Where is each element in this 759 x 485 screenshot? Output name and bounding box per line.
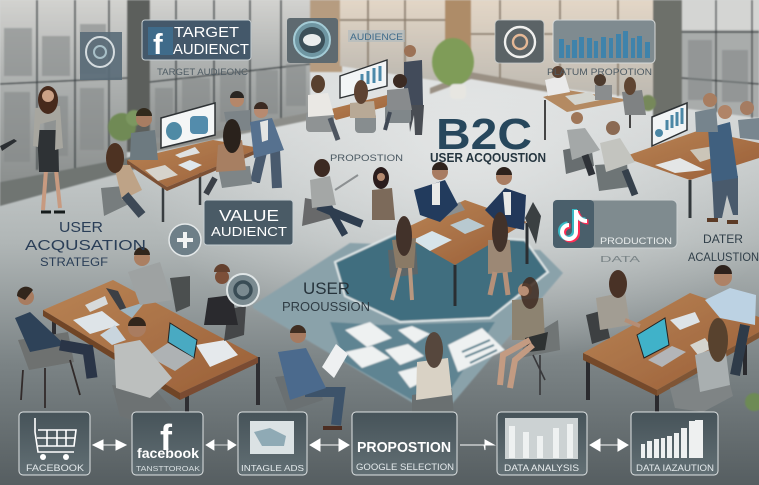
- user acquisition strategy label: USER: [59, 219, 103, 236]
- person: man left seated: [15, 287, 92, 408]
- person: man front seated: [112, 317, 172, 424]
- right warm window: [471, 0, 655, 100]
- person: woman dark top: [204, 264, 246, 341]
- skyline texture: [4, 24, 748, 162]
- heading: B2C: B2C: [436, 110, 532, 159]
- monitor upper middle: [340, 60, 387, 98]
- left window: [0, 0, 127, 182]
- user acquisition strategy label: ACQUSATION: [25, 237, 146, 254]
- icon: spiral card: [495, 20, 544, 63]
- label: data calculation: [688, 232, 759, 264]
- card: proposition google selection: [352, 412, 457, 475]
- people at top right table: [545, 66, 646, 115]
- tan column: [445, 0, 471, 76]
- left window base: [0, 150, 150, 206]
- person: seated light shirt: [595, 121, 635, 195]
- plant bottom right: [745, 393, 759, 411]
- monitor upper left: [161, 103, 215, 158]
- card: data analysis: DATA ANALYSIS: [504, 463, 579, 474]
- icon: facebook f: [148, 27, 173, 55]
- card: data visualization: [631, 412, 718, 475]
- teal upper platform: [335, 232, 548, 322]
- platform bars: [462, 340, 497, 363]
- person: seated woman right: [586, 270, 640, 344]
- person: seated woman table one: [101, 143, 142, 216]
- dark column: [127, 0, 150, 152]
- far right window: [682, 0, 759, 118]
- table upper middle: [327, 93, 400, 120]
- faint audience label: AUDIENCE: [350, 32, 403, 42]
- person: seated patterned shirt: [563, 112, 600, 175]
- person: standing man right: [707, 105, 738, 222]
- monitor right: [652, 103, 687, 146]
- people: [0, 45, 759, 428]
- person: woman white top: [306, 75, 338, 140]
- person: woman beige top: [350, 80, 376, 133]
- label: user proposition: PROOUSSION: [282, 299, 370, 314]
- bar chart card: [553, 20, 655, 63]
- label: user proposition: [282, 280, 370, 314]
- user acquisition strategy label: [25, 219, 146, 269]
- card: facebook: [132, 412, 203, 475]
- icon: tiktok: [553, 200, 594, 248]
- people right table back: [695, 93, 759, 140]
- card: facebook: f: [160, 417, 173, 458]
- tiktok production card: [553, 200, 677, 248]
- card: proposition google selection: GOOGLE SELECTION: [356, 462, 454, 473]
- card: data visualization: DATA IAZAUTION: [636, 463, 714, 473]
- person: man navy right: [485, 167, 541, 244]
- label: proposition: PROPOSTION: [330, 153, 403, 164]
- table top right middle: [543, 90, 630, 140]
- target audience label box: TARGET: [174, 24, 239, 41]
- plant center with pot: [432, 38, 474, 99]
- person: man blue with tablet: [275, 325, 348, 428]
- person: woman from back brown: [206, 119, 252, 194]
- middle window sill: [150, 112, 310, 153]
- card: facebook cart: FACEBOOK: [26, 463, 84, 473]
- building windows background: [0, 0, 759, 206]
- arrow: [310, 439, 349, 451]
- platform proposition label: PLATUM PROPOTION: [547, 67, 652, 78]
- laptop lower left: [148, 323, 197, 371]
- card: facebook: facebook: [137, 445, 199, 461]
- arrow: [460, 440, 494, 450]
- card: proposition google selection: PROPOSTION: [357, 439, 451, 456]
- person: standing man top: [404, 45, 424, 135]
- warm column: [310, 0, 342, 72]
- target audience label box: [142, 20, 251, 61]
- person: woman from back right: [670, 318, 733, 412]
- light ring: [335, 232, 548, 322]
- person: woman with tablet centre: [302, 159, 362, 235]
- icon: plus circle: [169, 224, 201, 256]
- person: man blue blazer: [250, 102, 284, 188]
- icon: brain circle card: [287, 18, 338, 63]
- laptop dark: [106, 288, 145, 318]
- top left icon card: [80, 32, 122, 80]
- laptop lower right: [637, 318, 686, 367]
- gray column: [653, 0, 683, 128]
- heading: user acquisition: USER ACQOUSTION: [430, 151, 546, 165]
- icon: google-style circle: [227, 274, 259, 306]
- person: woman tan centre right: [488, 212, 512, 295]
- value audience label box: [204, 200, 293, 245]
- plant right: [640, 95, 656, 111]
- person: woman centre: [372, 167, 395, 220]
- plants: [108, 38, 759, 411]
- card: facebook cart: [19, 412, 90, 475]
- person: man top lower table: [128, 247, 190, 312]
- person: man light blue shirt: [705, 265, 756, 375]
- table lower left: [43, 280, 258, 420]
- person: woman gray top: [385, 74, 412, 130]
- arrow: [206, 440, 236, 450]
- lower platform: [330, 322, 495, 400]
- table right: [623, 130, 759, 218]
- arrow: [590, 439, 628, 451]
- floor graphic platform: [253, 232, 563, 410]
- label: user proposition: USER: [303, 280, 350, 298]
- middle window: [150, 0, 310, 144]
- plant left: [108, 110, 142, 141]
- value audience label box: AUDIENCT: [211, 224, 287, 239]
- sill right: [430, 72, 560, 94]
- card: instagram ads: INTAGLE ADS: [241, 463, 304, 473]
- tables: [43, 90, 759, 430]
- user acquisition strategy label: STRATEGF: [40, 255, 108, 269]
- person: man back: [224, 91, 250, 132]
- table lower right: [583, 293, 759, 430]
- arrow: [93, 440, 126, 450]
- person: man navy blazer: [414, 162, 458, 222]
- table upper left: [127, 140, 260, 222]
- warm window: [340, 0, 445, 82]
- person: seated woman centre bottom: [500, 277, 560, 395]
- card: facebook: TANSTTOROAK: [136, 464, 200, 473]
- target audience label box: AUDIENCT: [173, 41, 249, 58]
- person: man behind monitor: [130, 108, 158, 160]
- table center: [397, 200, 527, 306]
- monitors and laptops: [106, 60, 687, 371]
- card: data analysis: [497, 412, 587, 475]
- value audience label box: VALUE: [219, 208, 279, 225]
- label: data calculation: DATER: [703, 232, 743, 246]
- person: woman from back bottom: [412, 332, 454, 423]
- person: standing woman left: [33, 86, 65, 212]
- mullions: [0, 0, 310, 170]
- sky far right: [682, 0, 759, 30]
- sheets: [345, 322, 505, 388]
- target audience sublabel: TARGET AUDIEONC: [157, 67, 248, 78]
- tiktok production card: PRODUCTION: [600, 236, 672, 246]
- card: instagram ads: [238, 412, 307, 475]
- tablet left: [0, 139, 17, 151]
- bottom flow of channel cards: [19, 412, 718, 475]
- faint data label: DATA: [600, 255, 641, 264]
- person: woman from back centre: [388, 216, 418, 300]
- target audience label box: f: [153, 29, 163, 61]
- faint audience label: [348, 30, 405, 42]
